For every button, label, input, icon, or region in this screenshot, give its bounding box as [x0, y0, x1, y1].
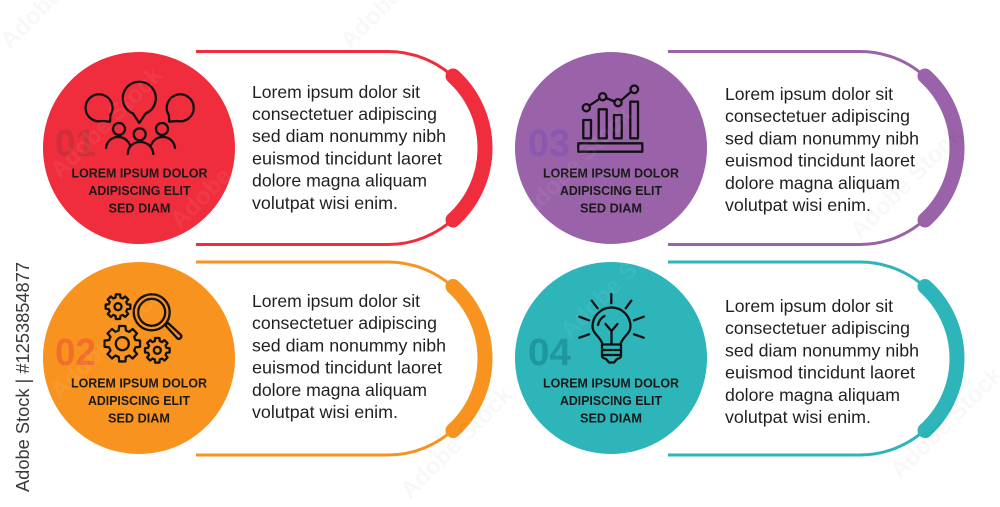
thick arc teal [925, 286, 957, 430]
number 03: 03 [528, 123, 570, 165]
paragraph: sed diam nonummy nibh [725, 128, 919, 148]
paragraph: volutpat wisi enim. [725, 195, 871, 215]
panel: step 03 [515, 52, 957, 244]
icon: light bulb [579, 294, 644, 362]
outline bracket purple [668, 52, 956, 244]
paragraph: sed diam nonummy nibh [252, 335, 446, 355]
paragraph: euismod tincidunt laoret [725, 151, 915, 171]
label text: LOREM IPSUM DOLOR [72, 166, 208, 180]
thick arc purple [925, 76, 957, 220]
icon: gears and magnifier [105, 294, 181, 363]
paragraph: Lorem ipsum dolor sit [725, 84, 893, 104]
watermark overlays: Adobe Stock [45, 61, 168, 184]
icon: people with speech bubbles [86, 82, 194, 154]
label text: LOREM IPSUM DOLOR [71, 376, 208, 390]
circle red [43, 52, 235, 244]
number 04: 04 [528, 332, 571, 374]
label text: ADIPISCING ELIT [560, 393, 662, 408]
label text: ADIPISCING ELIT [88, 183, 191, 198]
circle orange [43, 262, 235, 454]
label text: SED DIAM [108, 200, 170, 216]
paragraph: consectetuer adipiscing [725, 106, 910, 126]
label text: LOREM IPSUM DOLOR [543, 376, 680, 390]
paragraph: dolore magna aliquam [725, 385, 900, 405]
label text: SED DIAM [108, 410, 170, 426]
watermark overlays: Adobe Stock [555, 221, 678, 344]
watermark overlays: Adobe Stock [395, 381, 518, 504]
paragraph: sed diam nonummy nibh [725, 340, 919, 360]
paragraph: volutpat wisi enim. [252, 193, 398, 213]
panel: step 04 [515, 262, 957, 455]
paragraph: dolore magna aliquam [252, 380, 427, 400]
paragraph: sed diam nonummy nibh [252, 126, 446, 146]
watermark overlays: Adobe Stock [45, 281, 168, 404]
outline bracket orange [196, 262, 484, 455]
paragraph: consectetuer adipiscing [252, 313, 437, 333]
paragraph: euismod tincidunt laoret [725, 363, 915, 383]
number 01: 01 [55, 123, 96, 165]
thick arc red [453, 76, 485, 220]
paragraph: Lorem ipsum dolor sit [252, 82, 420, 102]
watermark overlays: Adobe [165, 162, 237, 234]
label text: SED DIAM [580, 410, 642, 426]
watermark overlays: Adobe Stock [845, 121, 968, 244]
paragraph: Lorem ipsum dolor sit [725, 296, 893, 316]
paragraph: consectetuer adipiscing [725, 318, 910, 338]
paragraph: dolore magna aliquam [252, 171, 427, 191]
label text: LOREM IPSUM DOLOR [543, 166, 680, 180]
circle teal [515, 262, 707, 454]
paragraph: consectetuer adipiscing [252, 104, 437, 124]
paragraph: Lorem ipsum dolor sit [252, 291, 420, 311]
thick arc orange [453, 286, 485, 430]
watermark overlays: Adobe Stock [515, 101, 638, 224]
panel: step 02 [43, 262, 485, 455]
label text: SED DIAM [580, 200, 642, 216]
paragraph: volutpat wisi enim. [725, 407, 871, 427]
paragraph: euismod tincidunt laoret [252, 148, 442, 168]
circle purple [515, 52, 707, 244]
number 02: 02 [55, 332, 96, 374]
label text: ADIPISCING ELIT [88, 393, 190, 408]
panel: step 01 [43, 52, 485, 244]
paragraph: volutpat wisi enim. [252, 402, 398, 422]
icon: bar chart with trend line [578, 86, 642, 152]
label text: ADIPISCING ELIT [560, 183, 662, 198]
paragraph: euismod tincidunt laoret [252, 358, 442, 378]
paragraph: dolore magna aliquam [725, 173, 900, 193]
outline bracket red [196, 52, 484, 244]
side credit text: Adobe Stock | #1253854877 [13, 262, 33, 492]
outline bracket teal [668, 262, 956, 455]
